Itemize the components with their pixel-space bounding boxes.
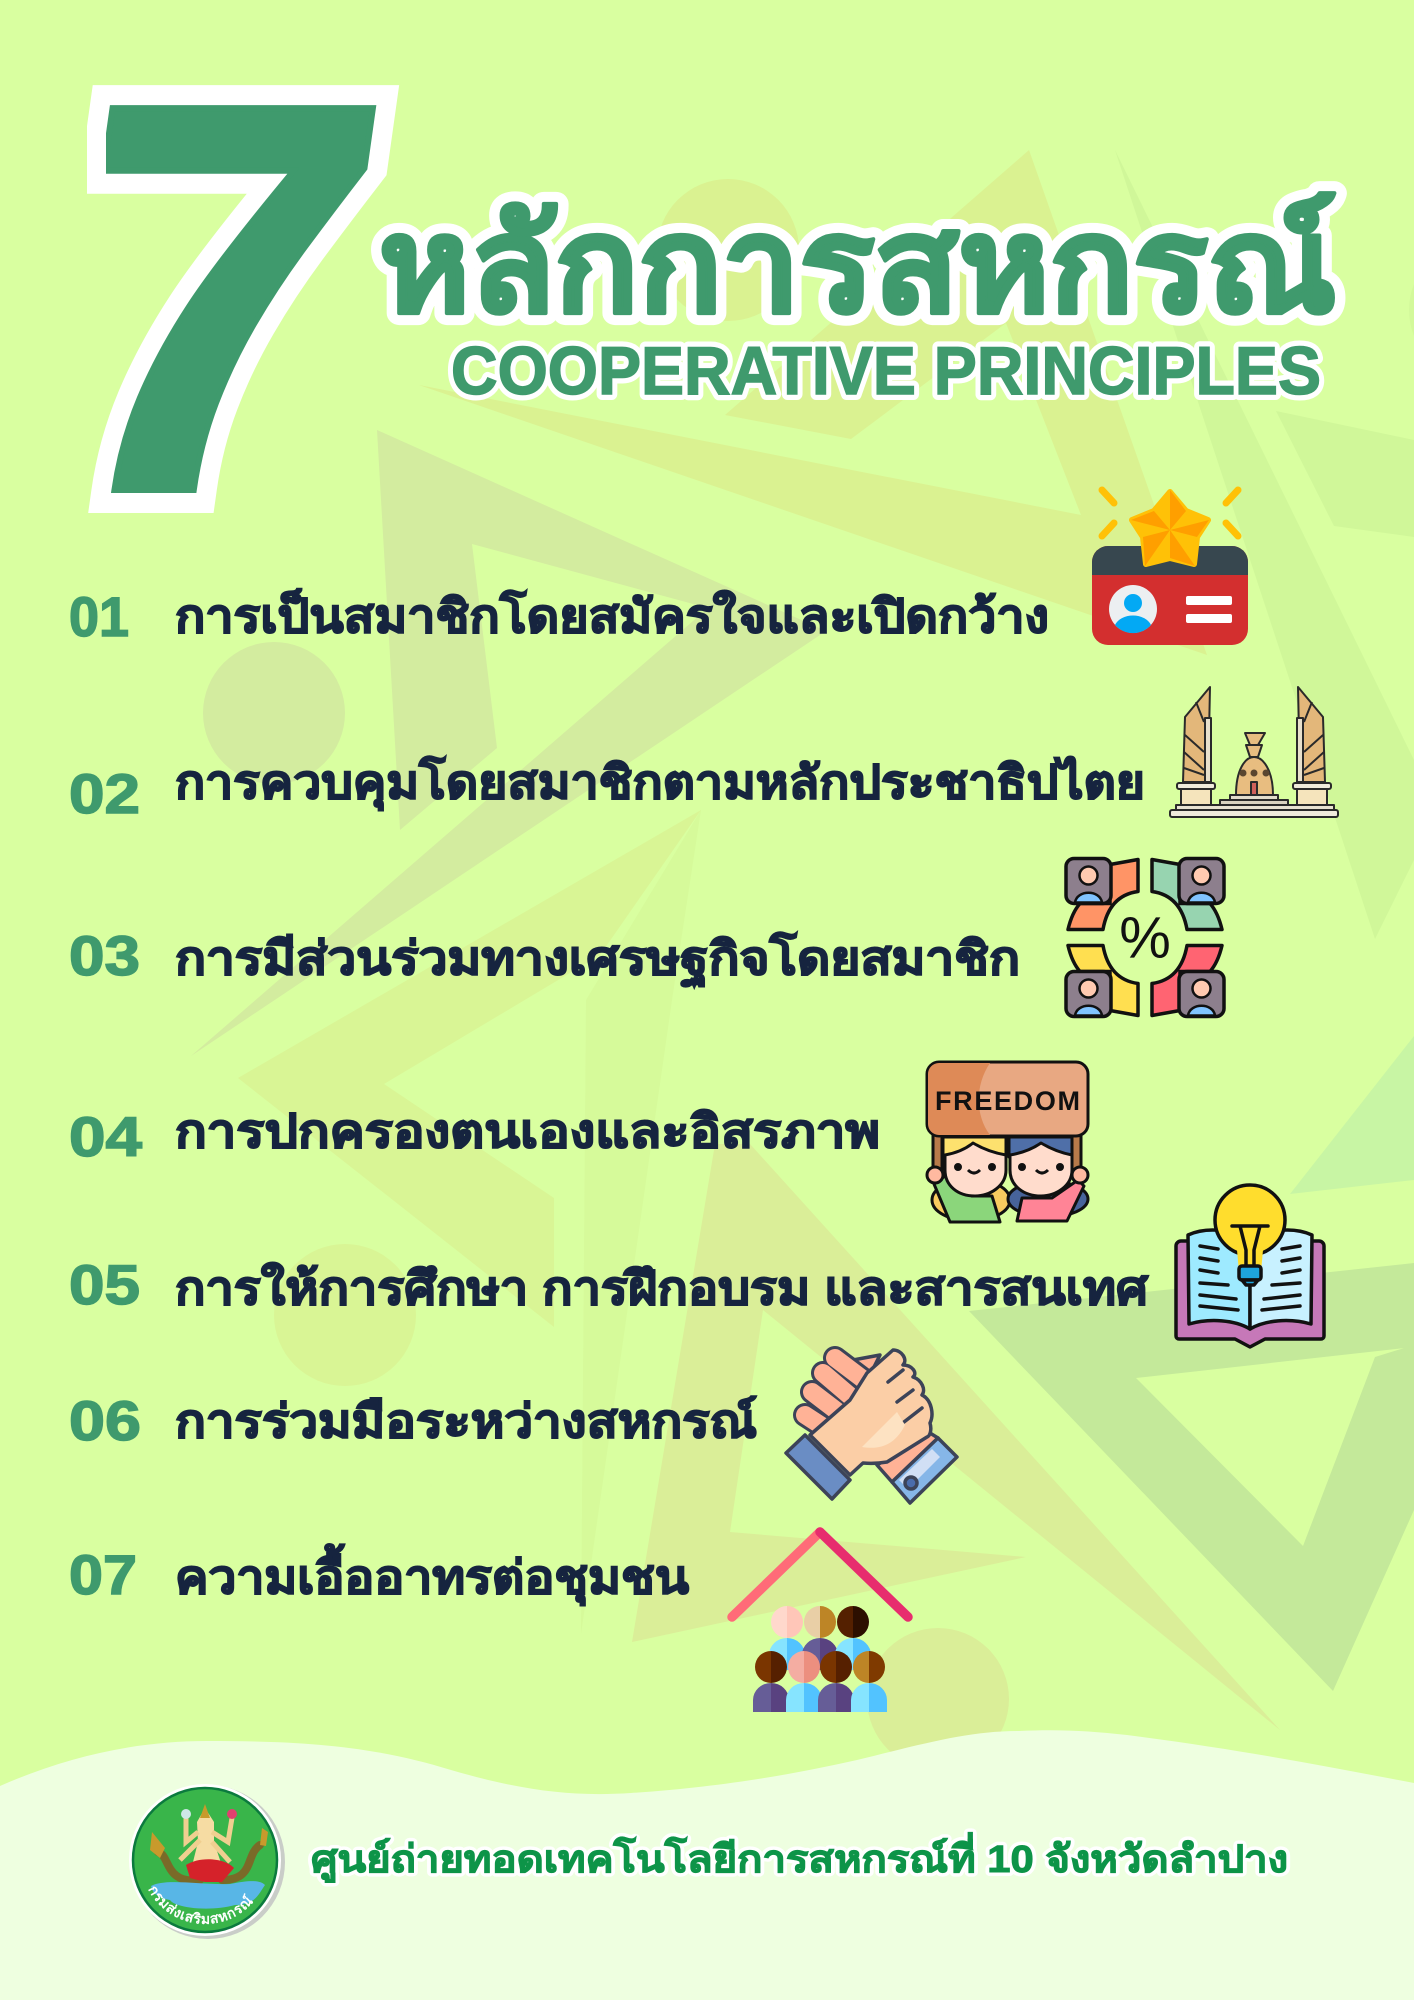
icon: shared percent	[1066, 858, 1224, 1016]
text 03: การมีส่วนร่วมทางเศรษฐกิจโดยสมาชิก	[175, 931, 1020, 988]
logo: cooperative promotion department seal: กรมส่งเสริมสหกรณ์	[148, 1886, 253, 1924]
number 06: 06	[69, 1389, 141, 1452]
icon: member card with star	[1092, 490, 1248, 645]
text 05: การให้การศึกษา การฝึกอบรม และสารสนเทศ	[175, 1261, 1149, 1314]
number 05: 05	[69, 1253, 140, 1316]
item 02	[69, 687, 1338, 825]
big number 7	[87, 85, 400, 513]
big number 7: 7	[18, 0, 414, 608]
icon: shared percent: %	[1119, 906, 1171, 970]
text 06: การร่วมมือระหว่างสหกรณ์	[175, 1395, 757, 1447]
icon: democracy monument	[1170, 687, 1338, 817]
number 01: 01	[69, 585, 129, 648]
item 04	[69, 1062, 1088, 1222]
text 02: การควบคุมโดยสมาชิกตามหลักประชาธิปไตย	[175, 755, 1145, 811]
subtitle english: COOPERATIVE PRINCIPLES	[451, 333, 1321, 409]
text 04: การปกครองตนเองและอิสรภาพ	[175, 1105, 880, 1157]
item 01	[69, 490, 1248, 648]
number 07: 07	[69, 1543, 137, 1606]
icon: community under a roof	[732, 1532, 908, 1712]
item 07	[69, 1532, 908, 1712]
icon: clasped hands	[786, 1350, 957, 1503]
title thai: หลักการสหกรณ์	[379, 192, 1336, 339]
number 02: 02	[69, 762, 140, 825]
text 01: การเป็นสมาชิกโดยสมัครใจและเปิดกว้าง	[175, 588, 1049, 642]
item 06	[69, 1350, 957, 1503]
text 07: ความเอื้ออาทรต่อชุมชน	[175, 1543, 690, 1606]
icon: book with light bulb	[1176, 1185, 1324, 1347]
number 03: 03	[69, 924, 140, 987]
number 04: 04	[69, 1105, 142, 1168]
icon: freedom kids	[927, 1062, 1088, 1222]
icon: freedom kids: FREEDOM	[935, 1086, 1080, 1116]
footer text: ศูนย์ถ่ายทอดเทคโนโลยีการสหกรณ์ที่ 10 จังหวัดลำปาง	[311, 1832, 1288, 1883]
big number 7: 7	[18, 0, 414, 608]
footer wave panel	[0, 1730, 1414, 2000]
item 05	[69, 1185, 1324, 1347]
logo: cooperative promotion department seal	[129, 1784, 285, 1939]
item 03	[69, 858, 1224, 1016]
subtitle english: COOPERATIVE PRINCIPLES	[451, 333, 1321, 409]
footer text: ศูนย์ถ่ายทอดเทคโนโลยีการสหกรณ์ที่ 10 จังหวัดลำปาง	[311, 1832, 1288, 1883]
title thai: หลักการสหกรณ์	[379, 192, 1336, 339]
